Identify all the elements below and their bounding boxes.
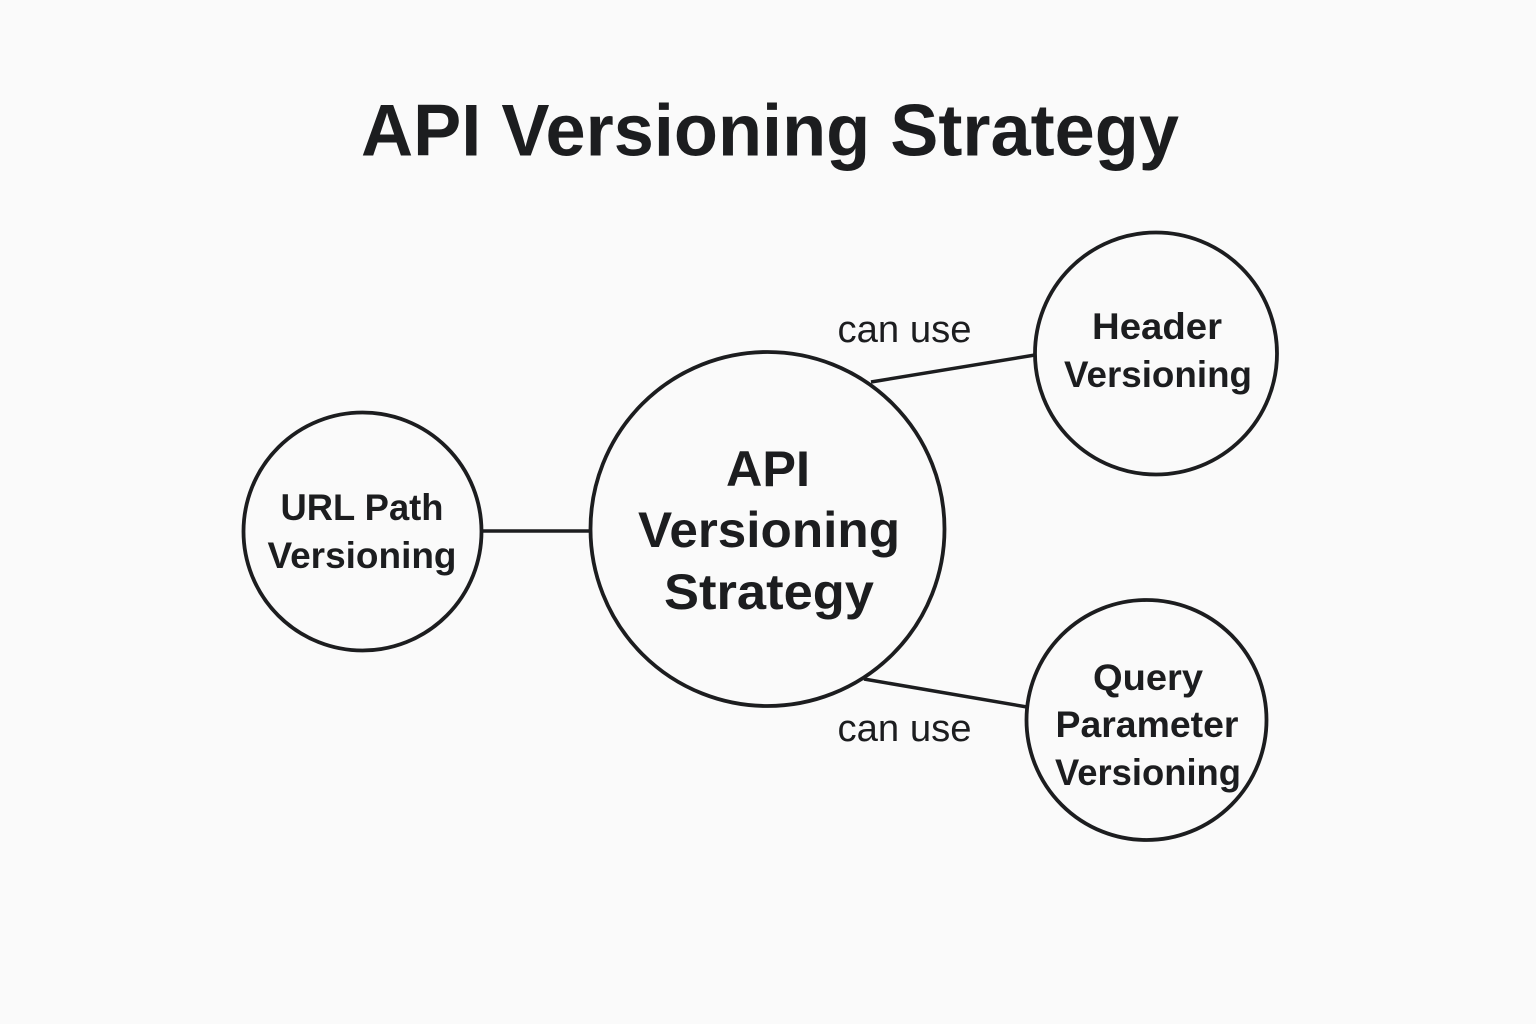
node: Header Versioning xyxy=(1035,232,1277,474)
node: URL Path Versioning: Versioning xyxy=(268,535,456,576)
node: URL Path Versioning: URL Path xyxy=(280,487,444,528)
connector: center to query xyxy=(864,679,1027,707)
node: Query Parameter Versioning: Versioning xyxy=(1055,752,1241,793)
node: center API Versioning Strategy xyxy=(590,352,944,706)
node: center API Versioning Strategy: Strategy xyxy=(664,563,874,620)
node: center API Versioning Strategy: Versioning xyxy=(638,501,900,558)
node: center API Versioning Strategy: API xyxy=(726,440,810,497)
node: Query Parameter Versioning xyxy=(1026,600,1266,840)
connector: center to header xyxy=(871,355,1035,382)
label: can use (upper): can use xyxy=(838,309,972,351)
connector: URL path to center xyxy=(482,529,590,533)
node: Query Parameter Versioning: Parameter xyxy=(1056,704,1238,745)
title: API Versioning Strategy xyxy=(361,90,1179,172)
node: Header Versioning: Header xyxy=(1092,306,1222,347)
node: URL Path Versioning xyxy=(244,412,482,650)
node: Query Parameter Versioning: Query xyxy=(1093,657,1203,698)
node: Header Versioning: Versioning xyxy=(1064,354,1252,395)
label: can use (lower): can use xyxy=(838,708,972,750)
